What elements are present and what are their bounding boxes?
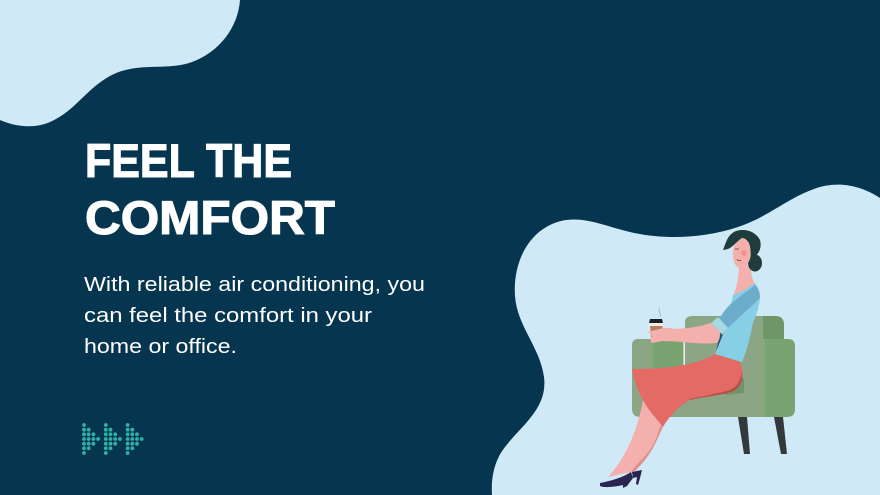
chair front arm [653, 339, 683, 368]
front leg [608, 400, 661, 477]
neck and chest [733, 264, 755, 296]
chair seat [725, 378, 744, 395]
illustration: woman on armchair [600, 230, 795, 488]
dark inner [716, 333, 724, 352]
body text [84, 274, 425, 358]
body text: With reliable air conditioning, you [84, 274, 425, 296]
arm [662, 323, 720, 344]
coffee cup [649, 308, 663, 341]
cheek [741, 250, 747, 256]
cuff [711, 317, 728, 334]
chair back [685, 316, 784, 345]
blob: top left [0, 0, 240, 126]
face [733, 238, 752, 268]
skirt [632, 354, 743, 427]
hair bun [748, 254, 762, 272]
eye and mouth [735, 249, 741, 261]
icon: dotted arrows [82, 423, 144, 455]
top [715, 283, 760, 362]
back leg [628, 424, 663, 473]
body text: home or office. [84, 336, 237, 358]
shoes [600, 470, 642, 488]
chair side arm [765, 339, 795, 417]
blob: bottom right [492, 185, 880, 495]
body text: can feel the comfort in your [84, 305, 372, 327]
sleeve [718, 285, 760, 328]
title: COMFORT [85, 191, 335, 244]
chair legs [738, 417, 787, 454]
title: FEEL THE [85, 134, 292, 187]
hair [723, 230, 761, 264]
title [85, 134, 335, 244]
chair body [632, 339, 765, 417]
hand [648, 328, 672, 343]
